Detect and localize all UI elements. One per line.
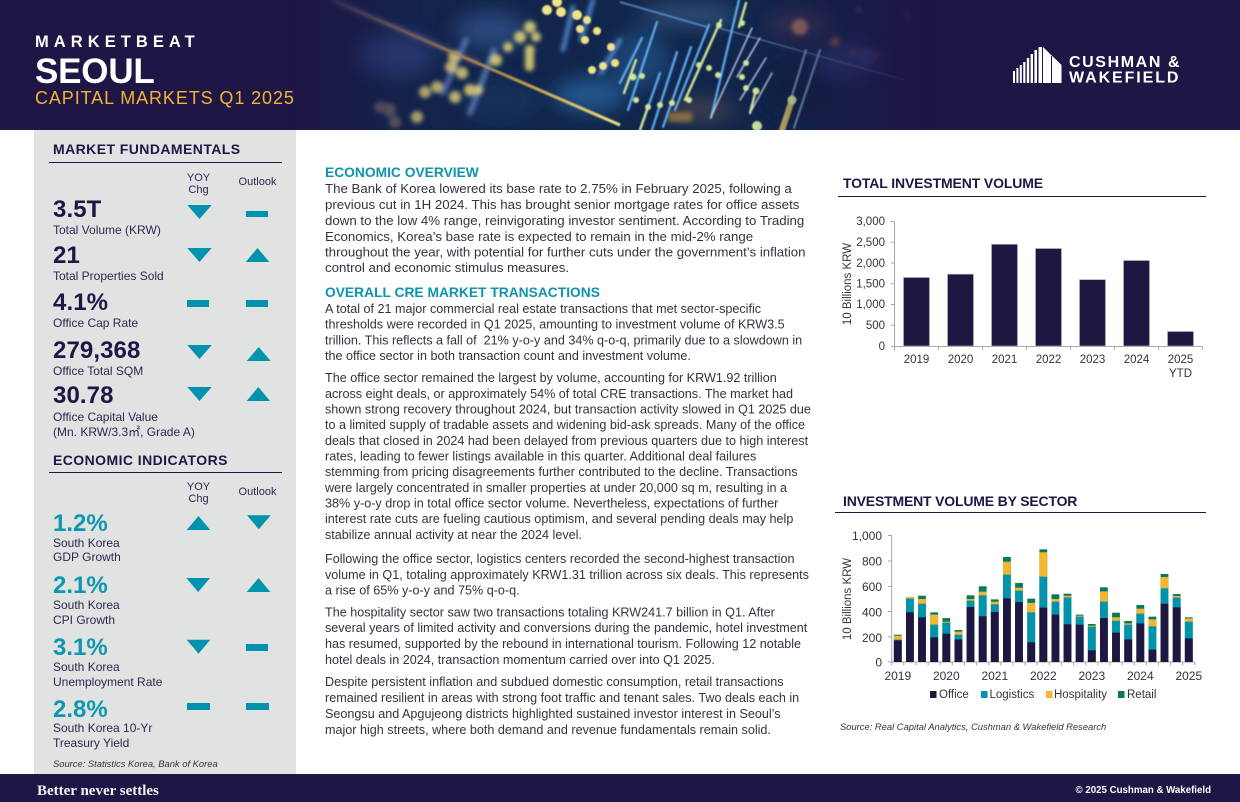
body: transactions summary: trillion. This reflects a fall of 21% y-o-y and 34% q-o-q, primarily due to a slowdown in xyxy=(325,334,802,348)
indicator: CPI growth: 2.1% xyxy=(53,572,108,599)
indicator: GDP growth: GDP Growth xyxy=(53,550,121,564)
heading: investment volume by sector: INVESTMENT VOLUME BY SECTOR xyxy=(843,493,1077,509)
column headers: market fundamentals xyxy=(187,172,277,196)
y axis labels: 500 xyxy=(866,320,885,332)
masthead: report subtitle: CAPITAL MARKETS Q1 2025 xyxy=(35,88,295,108)
metric: office total sqm: Office Total SQM xyxy=(53,364,143,378)
legend: Logistics xyxy=(990,689,1034,701)
x axis labels: 2023 xyxy=(1080,354,1105,366)
body: office sector xyxy=(324,371,811,542)
series: hospitality xyxy=(894,552,1193,662)
body: hospitality sector xyxy=(325,606,808,667)
indicator: GDP growth: 1.2% xyxy=(53,510,108,537)
series: retail xyxy=(894,549,1193,662)
body: logistics sector xyxy=(325,552,809,598)
y axis labels xyxy=(856,216,885,353)
body: retail sector: major high streets, where both demand and revenue fundamentals remain solid. xyxy=(325,723,771,737)
x axis labels: 2025 xyxy=(1168,354,1193,366)
y axis labels xyxy=(852,529,882,670)
column headers: economic indicators: Outlook xyxy=(239,486,277,498)
metric: office cap rate: Office Cap Rate xyxy=(53,316,138,330)
series: office xyxy=(894,598,1193,662)
y axis labels: 0 xyxy=(875,656,882,670)
body: economic overview: throughout the year, with potential for further cuts under the government’s inflation xyxy=(325,244,806,260)
body: transactions summary: thresholds were recorded in Q1 2025, amounting to investment volume of KRW3.5 xyxy=(325,318,785,332)
metric: office capital value: (Mn. KRW/3.3㎡, Grade A) xyxy=(53,425,195,439)
axis title: 10 Billions KRW xyxy=(842,558,854,640)
heading: total investment volume: TOTAL INVESTMENT VOLUME xyxy=(843,175,1043,191)
logo: Cushman & Wakefield xyxy=(1013,47,1181,86)
indicator: unemployment rate: Unemployment Rate xyxy=(53,675,163,689)
body: retail sector: Despite persistent inflation and subdued domestic consumption, retail transactions xyxy=(325,675,784,689)
header photo: financial chart xyxy=(331,0,904,130)
legend: Office xyxy=(939,689,969,701)
body: hospitality sector: several years of limited activity and conversions during the pandemic, hotel investment xyxy=(325,621,808,635)
column headers: economic indicators: Chg xyxy=(188,493,209,505)
heading: economic overview: ECONOMIC OVERVIEW xyxy=(325,165,480,180)
stacked bar chart: investment volume by sector xyxy=(842,529,1202,701)
body: office sector: were largely concentrated in smaller properties at under 20,000 sq m, resulting in a xyxy=(324,481,787,495)
logo: Cushman & Wakefield: CUSHMAN & xyxy=(1069,54,1181,71)
metric: office cap rate xyxy=(53,289,268,330)
x axis labels: 2020 xyxy=(933,669,960,683)
masthead: Marketbeat: MARKETBEAT xyxy=(35,33,200,51)
header banner xyxy=(0,0,1240,131)
column headers: market fundamentals: Chg xyxy=(188,184,209,196)
indicator: CPI growth: CPI Growth xyxy=(53,613,115,627)
body: office sector: 38% y-o-y drop in total office sector volume. Nevertheless, expectations of further xyxy=(325,496,778,510)
body: transactions summary: A total of 21 major commercial real estate transactions that met sector-specific xyxy=(325,302,761,316)
body: hospitality sector: hotel deals in 2024, transaction momentum carried over into Q1 2025. xyxy=(325,653,715,667)
text block: overall CRE market transactions xyxy=(324,285,811,737)
y axis labels: 1,000 xyxy=(852,529,882,543)
metric: office capital value xyxy=(53,382,270,439)
masthead: city name: SEOUL xyxy=(35,52,155,91)
metric: office total sqm: 279,368 xyxy=(53,337,140,364)
metric: total properties sold xyxy=(53,242,269,283)
body: hospitality sector: has resumed, supported by the rebound in international tourism. Following 12 notable xyxy=(325,637,801,651)
metric: total volume: 3.5T xyxy=(53,196,102,223)
axis title: 10 Billions KRW xyxy=(842,243,854,325)
heading: economic indicators: ECONOMIC INDICATORS xyxy=(53,452,228,468)
metric: office cap rate: 4.1% xyxy=(53,289,108,316)
body: economic overview: down to the low 4% range, reinvigorating investor sentiment. According to Trading xyxy=(325,213,804,228)
body: economic overview: Economics, Korea’s base rate is expected to remain in the mid-2% range xyxy=(325,229,753,244)
metric: office capital value: 30.78 xyxy=(53,382,114,409)
metric: total volume xyxy=(53,196,268,237)
body: hospitality sector: The hospitality sector saw two transactions totaling KRW241.7 billion in Q1. After xyxy=(325,606,775,620)
body: office sector: stabilize annual activity at near the 2024 level. xyxy=(325,528,582,542)
indicator: treasury yield: South Korea 10-Yr xyxy=(53,721,152,735)
body: retail sector: Seongsu and Apgujeong districts highlighted sustained investor interest in Seoul’s xyxy=(325,707,781,721)
heading: market fundamentals: MARKET FUNDAMENTALS xyxy=(53,141,241,157)
x axis labels: 2019 xyxy=(884,669,911,683)
y axis labels: 200 xyxy=(862,631,882,645)
x axis labels: 2020 xyxy=(948,354,973,366)
tagline: Better never settles xyxy=(37,783,159,799)
indicator: unemployment rate: 3.1% xyxy=(53,634,108,661)
body: logistics sector: a rise of 65% y-o-y and 75% q-o-q. xyxy=(325,584,520,598)
x axis labels: 2022 xyxy=(1030,669,1057,683)
source note: charts: Source: Real Capital Analytics, Cushman & Wakefield Research xyxy=(840,721,1106,732)
panel: left sidebar xyxy=(34,130,296,774)
copyright: © 2025 Cushman & Wakefield xyxy=(1076,785,1211,796)
body: office sector: deals that closed in 2024 had been delayed from previous quarters due to high interest xyxy=(325,434,809,448)
x axis labels xyxy=(884,669,1202,683)
source note: sidebar: Source: Statistics Korea, Bank of Korea xyxy=(53,758,218,769)
metric: total properties sold: Total Properties Sold xyxy=(53,269,164,283)
body: transactions summary xyxy=(325,302,802,363)
body: retail sector xyxy=(325,675,799,737)
body: retail sector: remained resilient in areas with strong foot traffic and tenant sales. Two deals each in xyxy=(325,691,799,705)
indicator: treasury yield: Treasury Yield xyxy=(53,736,129,750)
legend: Retail xyxy=(1127,689,1156,701)
body: economic overview: control and economic stimulus measures. xyxy=(325,260,569,275)
metric: office total sqm xyxy=(53,337,271,378)
legend xyxy=(930,689,1156,701)
indicator: unemployment rate xyxy=(53,634,268,689)
x axis labels: 2021 xyxy=(981,669,1008,683)
metric: total properties sold: 21 xyxy=(53,242,80,269)
indicator: GDP growth: South Korea xyxy=(53,536,120,550)
y axis labels: 1,000 xyxy=(856,299,885,311)
footer bar xyxy=(0,774,1240,802)
text block: economic overview xyxy=(325,165,806,275)
metric: total volume: Total Volume (KRW) xyxy=(53,223,161,237)
body: logistics sector: volume in Q1, totaling approximately KRW1.31 trillion across six deals. This represents xyxy=(325,568,809,582)
body: transactions summary: the office sector in both transaction count and investment volume. xyxy=(325,349,691,363)
body: office sector: rates, leading to fewer listings available in this quarter. Additional deal failures xyxy=(325,450,756,464)
body: economic overview: previous cut in 1H 2024. This has brought senior mortgage rates for office assets xyxy=(325,197,800,212)
logo: Cushman & Wakefield: WAKEFIELD xyxy=(1069,70,1180,86)
column headers: economic indicators: YOY xyxy=(187,481,211,493)
body: economic overview xyxy=(325,181,806,275)
y axis labels: 800 xyxy=(862,554,882,568)
x axis labels: 2024 xyxy=(1127,669,1154,683)
body: logistics sector: Following the office sector, logistics centers recorded the second-highest transaction xyxy=(325,552,794,566)
indicator: treasury yield: 2.8% xyxy=(53,696,108,723)
indicator: CPI growth: South Korea xyxy=(53,598,120,612)
y axis labels: 0 xyxy=(879,341,885,353)
x axis labels: YTD xyxy=(1169,368,1192,380)
series: logistics xyxy=(894,575,1193,662)
legend: Hospitality xyxy=(1054,689,1107,701)
body: office sector: The office sector remained the largest by volume, accounting for KRW1.92 trillion xyxy=(325,371,777,385)
bars xyxy=(904,244,1194,346)
y axis labels: 2,500 xyxy=(856,237,885,249)
indicator: GDP growth xyxy=(53,510,271,564)
body: office sector: to a limited supply of tradable assets and widening bid-ask spreads. Many of the office xyxy=(325,418,805,432)
body: office sector: stemming from pricing disagreements further contributed to the decline. Transactions xyxy=(325,465,798,479)
x axis labels: 2019 xyxy=(904,354,929,366)
y axis labels: 3,000 xyxy=(856,216,885,228)
x axis labels: 2024 xyxy=(1124,354,1150,366)
x axis labels: 2023 xyxy=(1078,669,1105,683)
bar chart: total investment volume xyxy=(842,216,1202,380)
y axis labels: 2,000 xyxy=(856,258,885,270)
x axis labels: 2021 xyxy=(992,354,1017,366)
body: office sector: across eight deals, or approximately 54% of total CRE transactions. The market had xyxy=(325,387,793,401)
body: office sector: interest rate cuts are fueling cautious optimism, and several pending deals may help xyxy=(325,512,793,526)
x axis labels xyxy=(904,354,1193,380)
heading: overall CRE market transactions: OVERALL CRE MARKET TRANSACTIONS xyxy=(325,285,600,300)
column headers: market fundamentals: YOY xyxy=(187,172,211,184)
indicator: CPI growth xyxy=(53,572,270,627)
column headers: market fundamentals: Outlook xyxy=(239,176,277,188)
x axis labels: 2022 xyxy=(1036,354,1061,366)
y axis labels: 1,500 xyxy=(856,278,885,290)
indicator: treasury yield xyxy=(53,696,269,750)
column headers: economic indicators xyxy=(187,481,277,505)
y axis labels: 600 xyxy=(862,580,882,594)
metric: office capital value: Office Capital Value xyxy=(53,410,158,424)
indicator: unemployment rate: South Korea xyxy=(53,660,120,674)
x axis labels: 2025 xyxy=(1175,669,1202,683)
y axis labels: 400 xyxy=(862,606,882,620)
body: economic overview: The Bank of Korea lowered its base rate to 2.75% in February 2025, following a xyxy=(325,181,792,196)
body: office sector: shown strong recovery throughout 2024, but transaction activity slowed in Q1 2025 due xyxy=(325,402,811,416)
